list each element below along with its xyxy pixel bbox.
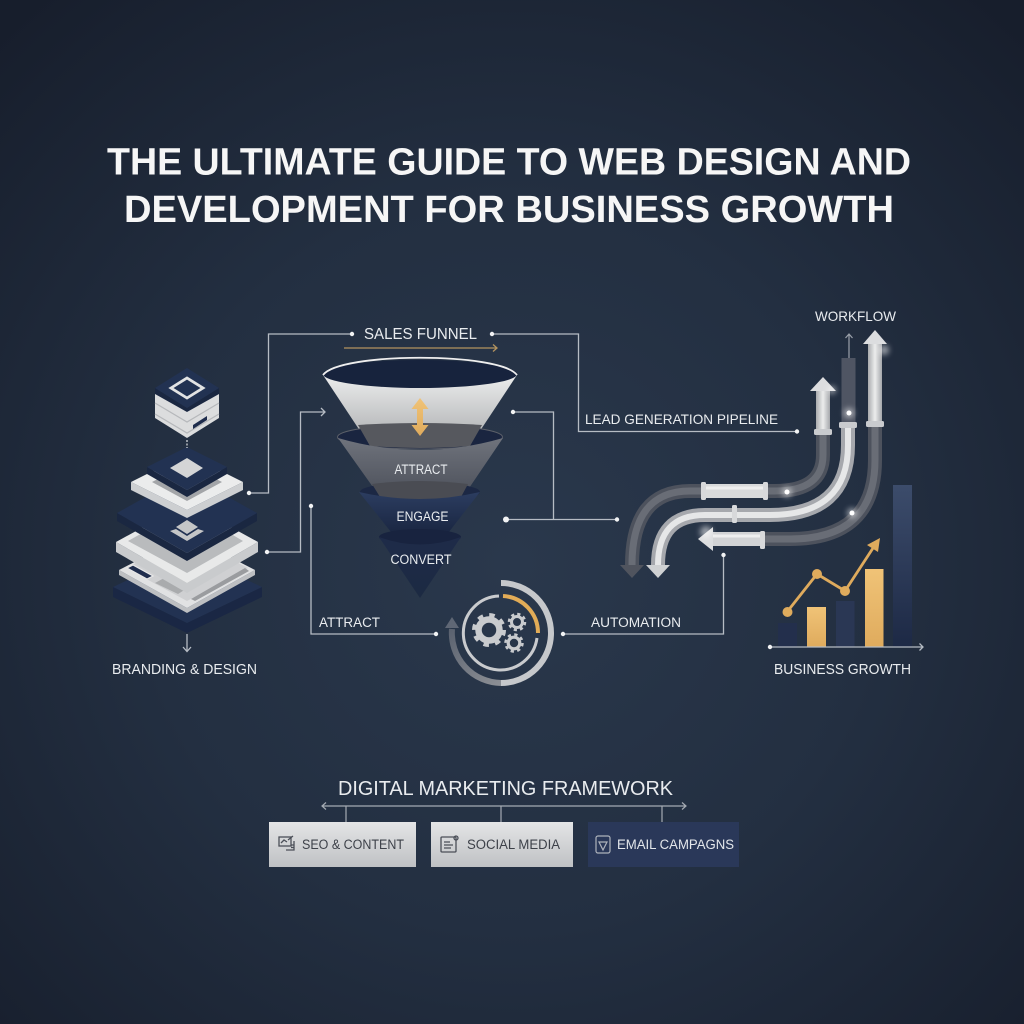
large white tray layer (116, 503, 258, 593)
funnel tier 1 (323, 358, 517, 446)
axis (768, 644, 923, 650)
bar 2 (807, 607, 826, 647)
card: seo and content (269, 822, 416, 867)
label: attract: ATTRACT (394, 462, 448, 477)
card: email campaigns: EMAIL CAMPAGNS (617, 837, 734, 852)
label: sales funnel: SALES FUNNEL (364, 326, 477, 343)
automation gear cycle (445, 583, 551, 683)
funnel tier 2 (338, 423, 503, 501)
icon: gears (474, 614, 525, 652)
connector: attract to automation (309, 504, 438, 636)
connector: automation to growth (561, 553, 726, 636)
outlined white layer (119, 535, 255, 613)
isometric layer stack (113, 368, 262, 633)
sales funnel (323, 358, 517, 598)
connector: funnel to pipeline (503, 410, 619, 522)
inner ring (463, 596, 537, 670)
icon: social (441, 836, 458, 852)
icon: email (596, 836, 610, 853)
glow dots (700, 345, 889, 538)
funnel tier 3 (359, 481, 480, 537)
title: THE ULTIMATE GUIDE TO WEB DESIGN AND (107, 142, 911, 184)
bar 5 (893, 485, 912, 647)
label: lead generation pipeline: LEAD GENERATION PIPELINE (585, 411, 778, 427)
connector: branding to sales funnel (247, 332, 354, 495)
icon: gold double arrow (412, 398, 428, 436)
title: DEVELOPMENT FOR BUSINESS GROWTH (124, 189, 894, 231)
navy plate layer (147, 447, 227, 497)
top cube (155, 368, 219, 438)
heading: digital marketing framework: DIGITAL MARKETING FRAMEWORK (338, 778, 674, 800)
bar 4 (865, 569, 884, 647)
outer ring (501, 583, 551, 683)
gold arc (503, 596, 538, 633)
large navy layer (117, 474, 257, 561)
icon: seo (279, 836, 294, 850)
funnel tier 4 (379, 529, 461, 598)
trend line (782, 538, 880, 617)
card: social media: SOCIAL MEDIA (467, 837, 560, 852)
framework bracket (322, 802, 686, 822)
label: business growth: BUSINESS GROWTH (774, 662, 911, 678)
white plate layer (131, 454, 243, 518)
arrow: workflow thin (846, 334, 852, 358)
pipe 1 (620, 377, 836, 578)
card: email campaigns (588, 822, 739, 867)
card: social media (431, 822, 573, 867)
bar 1 (778, 623, 797, 647)
arrow: down to branding (183, 634, 191, 652)
dotted link (186, 440, 188, 448)
pipe 3 (698, 330, 887, 551)
label: attract lower: ATTRACT (319, 615, 380, 630)
arrow: gold funnel direction (344, 344, 497, 352)
label: convert: CONVERT (390, 552, 452, 567)
label: automation: AUTOMATION (591, 615, 681, 630)
label: engage: ENGAGE (396, 509, 448, 524)
title (107, 142, 911, 231)
connector: sales funnel to pipeline (490, 332, 799, 434)
pipe 2 (646, 358, 857, 578)
cycle arrow (445, 617, 501, 683)
bar 3 (836, 601, 854, 647)
label: branding and design: BRANDING & DESIGN (112, 662, 257, 678)
connector: branding to funnel top (265, 408, 325, 554)
pipeline pipes (620, 330, 889, 578)
business growth chart (768, 485, 923, 650)
card: seo and content: SEO & CONTENT (302, 837, 404, 852)
bottom navy layer (113, 552, 262, 633)
label: workflow: WORKFLOW (815, 308, 897, 324)
